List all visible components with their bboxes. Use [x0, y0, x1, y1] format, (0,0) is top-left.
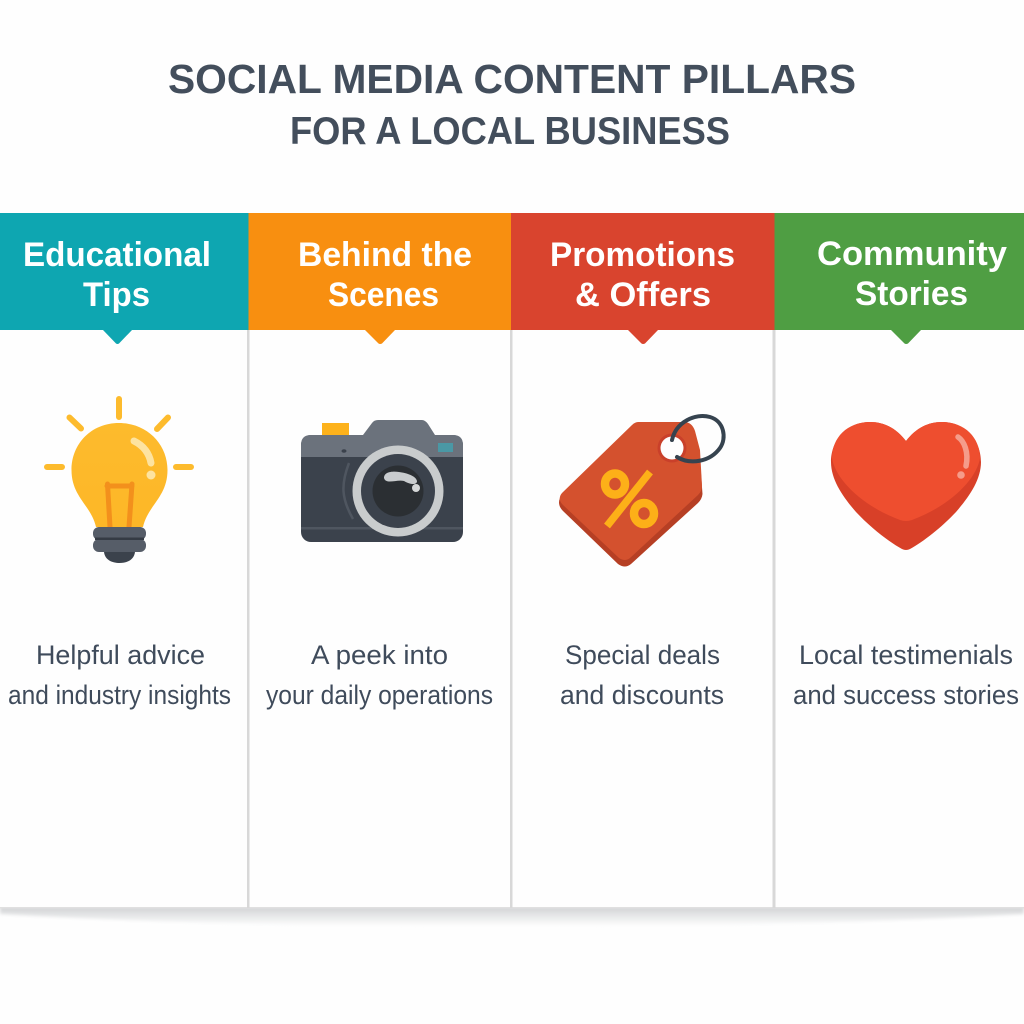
- title: FOR A LOCAL BUSINESS: [290, 110, 730, 153]
- description: community stories: Local testimenials: [799, 640, 1013, 670]
- header: promotions and offers: [511, 213, 774, 344]
- header: behind the scenes: Behind the: [298, 236, 472, 274]
- icon: heart: [831, 422, 981, 550]
- icon: camera: [301, 420, 463, 542]
- description: behind the scenes: A peek into: [311, 640, 448, 670]
- description: promotions and offers: [560, 640, 724, 710]
- header: educational tips: Tips: [83, 276, 150, 314]
- description: behind the scenes: your daily operations: [266, 680, 493, 710]
- header: promotions and offers: & Offers: [575, 276, 711, 314]
- panel: promotions and offers: [511, 213, 774, 710]
- panel: community stories: [774, 213, 1024, 710]
- description: community stories: and success stories: [793, 680, 1019, 710]
- header: behind the scenes: Scenes: [328, 276, 439, 314]
- title: SOCIAL MEDIA CONTENT PILLARS: [168, 56, 856, 102]
- header: community stories: Stories: [855, 275, 968, 313]
- description: promotions and offers: Special deals: [565, 640, 720, 670]
- description: educational tips: Helpful advice: [36, 640, 205, 670]
- description: educational tips: [8, 640, 231, 710]
- icon: light bulb: [47, 399, 191, 563]
- panel: educational tips: [0, 213, 248, 710]
- header: educational tips: Educational: [23, 236, 211, 274]
- description: community stories: [793, 640, 1019, 710]
- title: [168, 56, 856, 153]
- card shadow: [0, 895, 1024, 927]
- description: promotions and offers: and discounts: [560, 680, 724, 710]
- header: educational tips: [0, 213, 248, 344]
- header: promotions and offers: Promotions: [550, 236, 735, 274]
- icon: price tag: [559, 416, 724, 566]
- header: community stories: [774, 213, 1024, 344]
- column dividers: [247, 330, 776, 908]
- header: community stories: Community: [817, 235, 1007, 273]
- description: behind the scenes: [266, 640, 493, 710]
- header: behind the scenes: [248, 213, 511, 344]
- panel: behind the scenes: [248, 213, 511, 710]
- description: educational tips: and industry insights: [8, 680, 231, 710]
